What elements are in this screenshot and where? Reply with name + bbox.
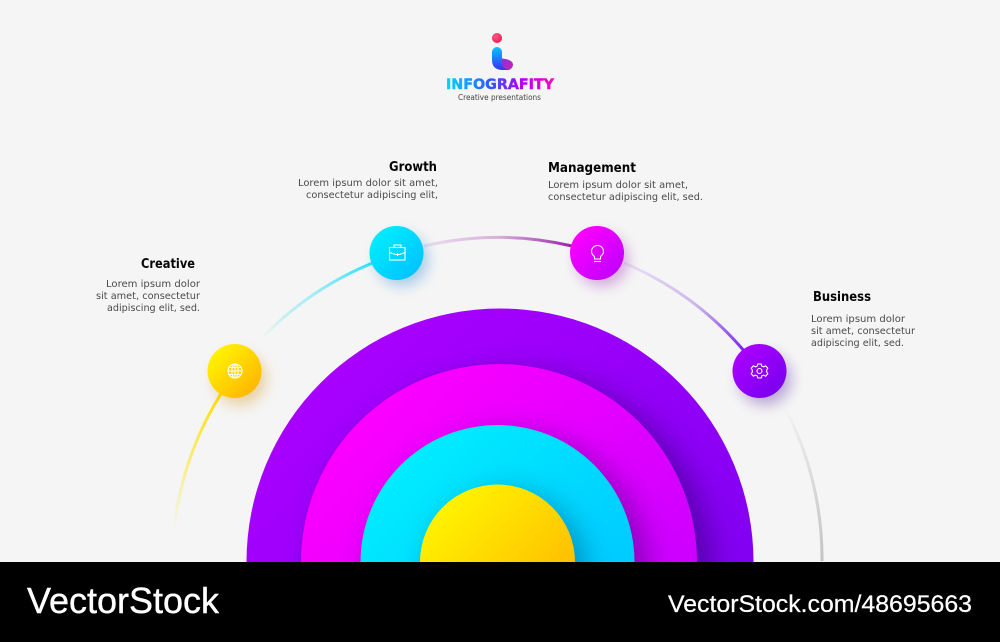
arc: connector segments (174, 237, 822, 561)
concentric semicircles (246, 308, 754, 562)
text block: Management (548, 160, 703, 203)
watermark banner (0, 562, 1000, 642)
node: Growth (370, 226, 428, 286)
brand name: VectorStock (27, 580, 220, 621)
node: Management (570, 226, 628, 286)
ring: cyan (360, 425, 634, 562)
text block: Business: sit amet, consectetur (811, 326, 916, 337)
text block: Creative: Creative (141, 256, 195, 272)
text block: Growth: Growth (389, 159, 437, 175)
text block: Creative: adipiscing elit, sed. (107, 303, 200, 314)
ring: magenta (301, 364, 697, 562)
text block: Business (811, 289, 916, 349)
text block: Management: Lorem ipsum dolor sit amet, (548, 180, 688, 191)
node: Business (732, 344, 791, 405)
icon: briefcase (390, 245, 405, 260)
icon: gear (751, 364, 768, 378)
ring: purple (246, 308, 754, 562)
text block: Growth (298, 159, 438, 201)
text block: Growth: consectetur adipiscing elit, (306, 190, 438, 201)
image url: VectorStock.com/48695663 (668, 591, 972, 618)
text block: Management: consectetur adipiscing elit, sed. (548, 192, 703, 203)
node: Creative (208, 344, 266, 405)
text block: Business: Lorem ipsum dolor (811, 314, 906, 325)
text block: Creative: Lorem ipsum dolor (106, 279, 201, 290)
text block: Creative (96, 256, 201, 314)
icon: logo mark (492, 33, 513, 70)
icon: globe (228, 364, 242, 378)
text block: Growth: Lorem ipsum dolor sit amet, (298, 178, 438, 189)
text block: Business: Business (813, 289, 871, 305)
logo: Infografity (446, 33, 555, 102)
text block: Creative: sit amet, consectetur (96, 291, 201, 302)
ring: yellow core (420, 484, 575, 562)
icon: lightbulb (592, 246, 604, 262)
logo tagline: Creative presentations (458, 93, 541, 102)
logo wordmark: INFOGRAFITY (446, 77, 555, 93)
text block: Management: Management (548, 160, 636, 176)
text block: Business: adipiscing elit, sed. (811, 338, 904, 349)
